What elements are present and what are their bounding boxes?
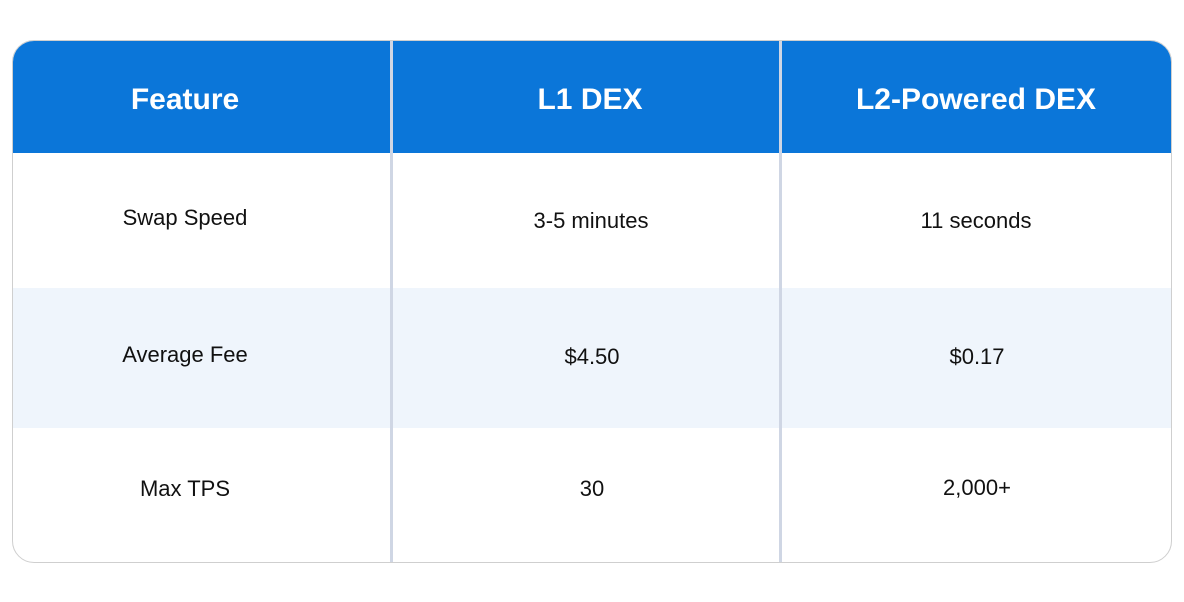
column divider 2: [779, 41, 782, 562]
row: Average Fee: Average Fee: [122, 342, 248, 367]
cell: 30: 30: [580, 476, 604, 501]
header: L2-Powered DEX: L2-Powered DEX: [856, 83, 1096, 116]
cell: $4.50: $4.50: [564, 344, 620, 369]
cell: 2,000+: 2,000+: [943, 475, 1011, 500]
column divider 1: [390, 41, 393, 562]
row: Max TPS: Max TPS: [140, 476, 230, 501]
header: L1 DEX: L1 DEX: [537, 83, 643, 116]
row 2 background: [13, 288, 1171, 428]
cell: $0.17: $0.17: [949, 344, 1005, 369]
header: Feature: Feature: [131, 83, 239, 116]
cell: 11 seconds: 11 seconds: [921, 208, 1031, 233]
row: Swap Speed: Swap Speed: [123, 205, 247, 230]
cell: 3-5 minutes: 3-5 minutes: [534, 208, 648, 233]
header row: [13, 41, 1171, 153]
